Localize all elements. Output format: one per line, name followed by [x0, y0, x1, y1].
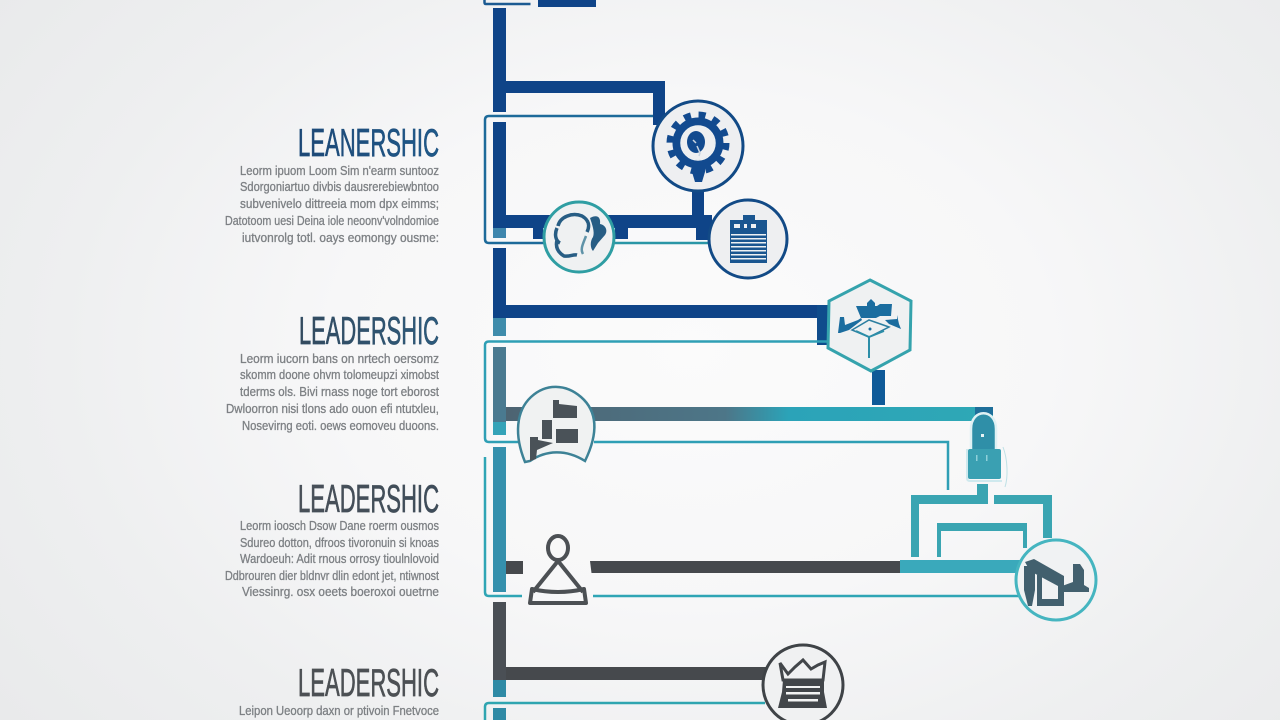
body text 1: Sdorgoniartuo divbis dausrerebiewbntoo — [240, 180, 439, 194]
icon: crown badge — [763, 645, 843, 720]
body text 3 — [225, 519, 439, 599]
heading 1: LEANERSHIC — [298, 122, 439, 165]
body text 2: Nosevirng eoti. oews eomoveu duoons. — [242, 419, 439, 433]
branch 1 connectors — [485, 81, 712, 243]
heading 4: LEADERSHIC — [298, 662, 439, 705]
heading 2: LEADERSHIC — [299, 310, 439, 353]
icon: tag badge — [518, 387, 594, 462]
body text 4: Leipon Ueoorp daxn or ptivoin Fnetvoce — [239, 704, 439, 718]
body text 2: skomm doone ohvm tolomeupzi ximobst — [240, 368, 439, 382]
body text 2 — [226, 352, 439, 433]
icon: hexagon badge — [828, 280, 911, 371]
body text 1: subvenivelo dittreeia mom dpx eimms; — [240, 197, 439, 211]
icon: padlock badge — [967, 413, 1007, 487]
body text 2: Dwloorron nisi tlons ado ouon efi ntutxleu, — [226, 402, 439, 416]
branch 2 connectors — [485, 305, 993, 490]
body text 3: Viessinrg. osx oeets boeroxoi ouetrne — [242, 585, 439, 599]
body text 2: Leorm iucorn bans on nrtech oersomz — [240, 352, 439, 366]
branch 3 connectors — [485, 457, 1022, 596]
body text 1: iutvonrolg totl. oays eomongy ousme: — [242, 231, 439, 245]
top connector fragment — [484, 0, 596, 7]
central trunk line — [493, 8, 506, 720]
block 2: heading and text — [226, 310, 439, 433]
body text 1: Datotoom uesi Deina iole neoonv'volndomioe — [225, 214, 439, 228]
icon: pawn figure — [530, 536, 586, 603]
icon: document badge — [709, 200, 787, 278]
body text 1: Leorm ipuom Loom Sim n'earm suntooz — [240, 164, 439, 178]
body text 2: tderms ols. Bivi rnass noge tort eborost — [240, 385, 439, 399]
body text 3: Wardoeuh: Adit rnous orrosy tioulnlovoid — [240, 552, 439, 566]
block 4: heading and text — [239, 662, 439, 718]
heading 3: LEADERSHIC — [298, 478, 439, 521]
body text 3: Sdureo dotton, dfroos tivoronuin si knoas — [240, 536, 439, 550]
block 3: heading and text — [225, 478, 439, 599]
body text 3: Leorm ioosch Dsow Dane roerm ousmos — [240, 519, 439, 533]
icon: gear badge — [653, 101, 743, 191]
body text 3: Ddbrouren dier bldnvr dlin edont jet, ntiwnost — [225, 569, 439, 583]
block 1: heading and text — [225, 122, 439, 245]
icon: globe badge — [544, 202, 614, 272]
icon: machine badge — [1016, 540, 1096, 620]
body text 1 — [225, 164, 439, 245]
branch 3 brackets — [911, 484, 1052, 557]
branch 4 connectors — [485, 667, 766, 720]
